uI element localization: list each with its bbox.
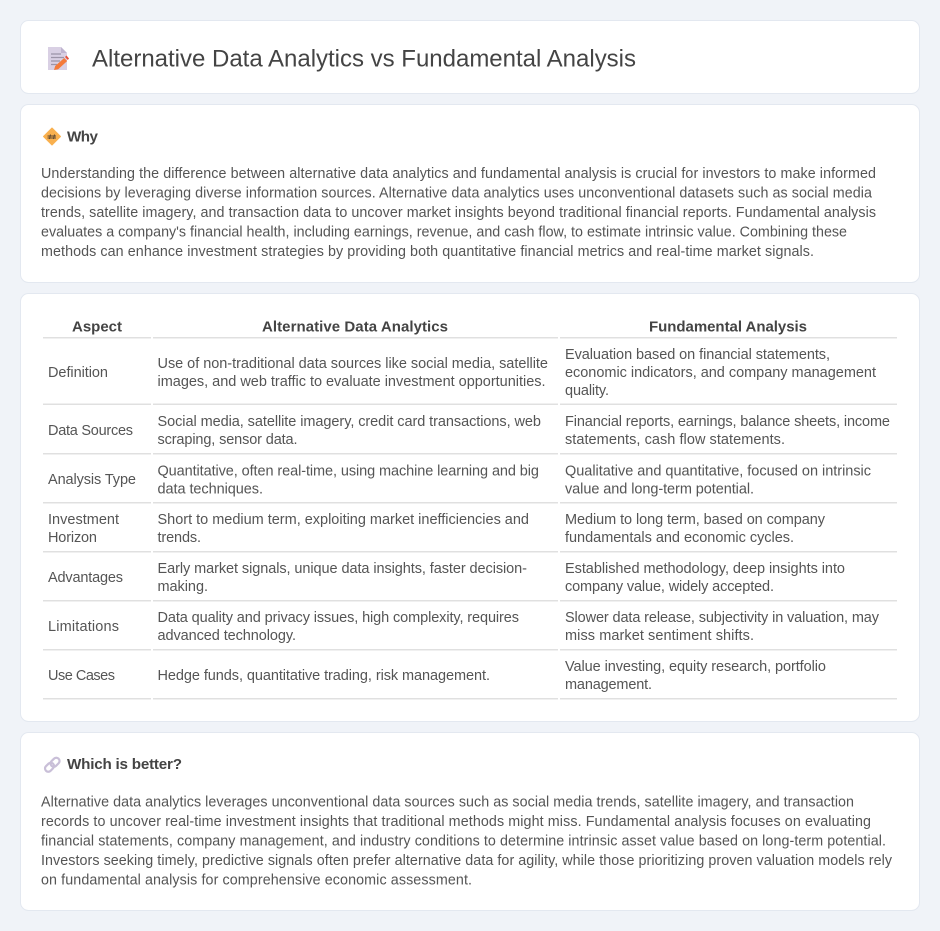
table header row: Aspect [72,318,122,336]
row: use cases: Hedge funds, quantitative trading, risk management. [158,668,490,684]
row: data sources: Financial reports, earnings, balance sheets, income [565,414,890,430]
heading: which is better: Which is better? [67,756,182,773]
row: investment horizon: Investment [48,512,119,528]
text block: which is better paragraph: on fundamental analysis for comprehensive economic assessment. [41,872,472,888]
title: Alternative Data Analytics vs Fundamental Analysis [92,46,636,72]
row: investment horizon: Short to medium term, exploiting market inefficiencies and [158,512,529,528]
text block: which is better paragraph [41,794,893,888]
row: use cases: Value investing, equity research, portfolio [565,659,826,675]
text block: why paragraph: evaluates a company's financial health, including earnings, revenue, and cash flow, to estimate intrinsic value. Combining these [41,224,847,240]
row: advantages: Established methodology, deep insights into [565,561,845,577]
row: data sources: statements, cash flow statements. [565,432,785,448]
row: advantages [48,561,845,595]
row: investment horizon: fundamentals and economic cycles. [565,530,794,546]
row: data sources: Social media, satellite imagery, credit card transactions, web [158,414,541,430]
panel: why [20,104,920,282]
row: data sources: scraping, sensor data. [158,432,298,448]
row: analysis type: Quantitative, often real-time, using machine learning and big [158,464,539,480]
row: limitations: advanced technology. [158,628,296,644]
heading: why: Why [67,128,99,146]
panel: comparison table [20,294,920,722]
row: limitations: Limitations [48,619,119,635]
row: definition [48,347,876,399]
row: definition: Use of non-traditional data sources like social media, satellite [158,356,548,372]
text block: why paragraph: Understanding the difference between alternative data analytics and fundamental analysis is crucial for investors to make informed [41,166,876,182]
row: advantages: Advantages [48,570,123,586]
row: analysis type: value and long-term potential. [565,482,754,498]
row: advantages: making. [158,579,208,595]
table header row: Fundamental Analysis [649,318,807,336]
text block: why paragraph [41,166,876,260]
row: data sources: Data Sources [48,423,133,439]
text block: why paragraph: decisions by leveraging diverse information sources. Alternative data analytics uses unconventional datasets such as social media [41,186,872,202]
row: limitations: miss market sentiment shifts. [565,628,754,644]
panel: header [20,20,920,94]
row: use cases [48,659,826,693]
row: analysis type [48,464,871,498]
text block: which is better paragraph: Investors seeking timely, predictive signals often prefer alternative data for agility, while those prioritizing proven valuation models rely [41,853,893,869]
row: analysis type: data techniques. [158,482,263,498]
row: limitations: Data quality and privacy issues, high complexity, requires [158,610,519,626]
row: investment horizon: Horizon [48,530,97,546]
text block: which is better paragraph: records to uncover real-time investment insights that traditional methods might miss. Fundamental analysis focuses on evaluating [41,814,871,830]
icon: orange diamond [44,128,60,145]
row: limitations: Slower data release, subjectivity in valuation, may [565,610,880,626]
row: data sources [48,414,890,448]
row: definition: Evaluation based on financial statements, [565,347,830,363]
text block: why paragraph: methods can enhance investment strategies by providing both quantitative financial metrics and real-time market signals. [41,244,814,260]
row: definition: images, and web traffic to evaluate investment opportunities. [158,374,546,390]
row: use cases: Use Cases [48,668,115,684]
row: limitations [48,610,880,644]
text block: which is better paragraph: financial statements, company management, and industry conditions to determine intrinsic asset value based on long-term potential. [41,834,886,850]
row: investment horizon [48,512,826,546]
row: analysis type: Qualitative and quantitative, focused on intrinsic [565,464,871,480]
icon: chain link [44,756,61,773]
row: use cases: management. [565,677,652,693]
text block: why paragraph: trends, satellite imagery, and transaction data to uncover market insights beyond traditional financial reports. Fundamental analysis [41,205,876,221]
row: definition: quality. [565,383,609,399]
row: definition: Definition [48,365,108,381]
row: investment horizon: Medium to long term, based on company [565,512,826,528]
row: definition: economic indicators, and company management [565,365,876,381]
table header row: Alternative Data Analytics [262,318,448,336]
row: analysis type: Analysis Type [48,472,136,488]
row: investment horizon: trends. [158,530,201,546]
row: advantages: Early market signals, unique data insights, faster decision- [158,561,527,577]
table header row [72,318,807,336]
text block: which is better paragraph: Alternative data analytics leverages unconventional data sources such as social media trends, satellite imagery, and transaction [41,794,854,810]
panel: which is better [20,732,920,910]
row: advantages: company value, widely accepted. [565,579,774,595]
icon: memo with pencil [48,47,69,70]
